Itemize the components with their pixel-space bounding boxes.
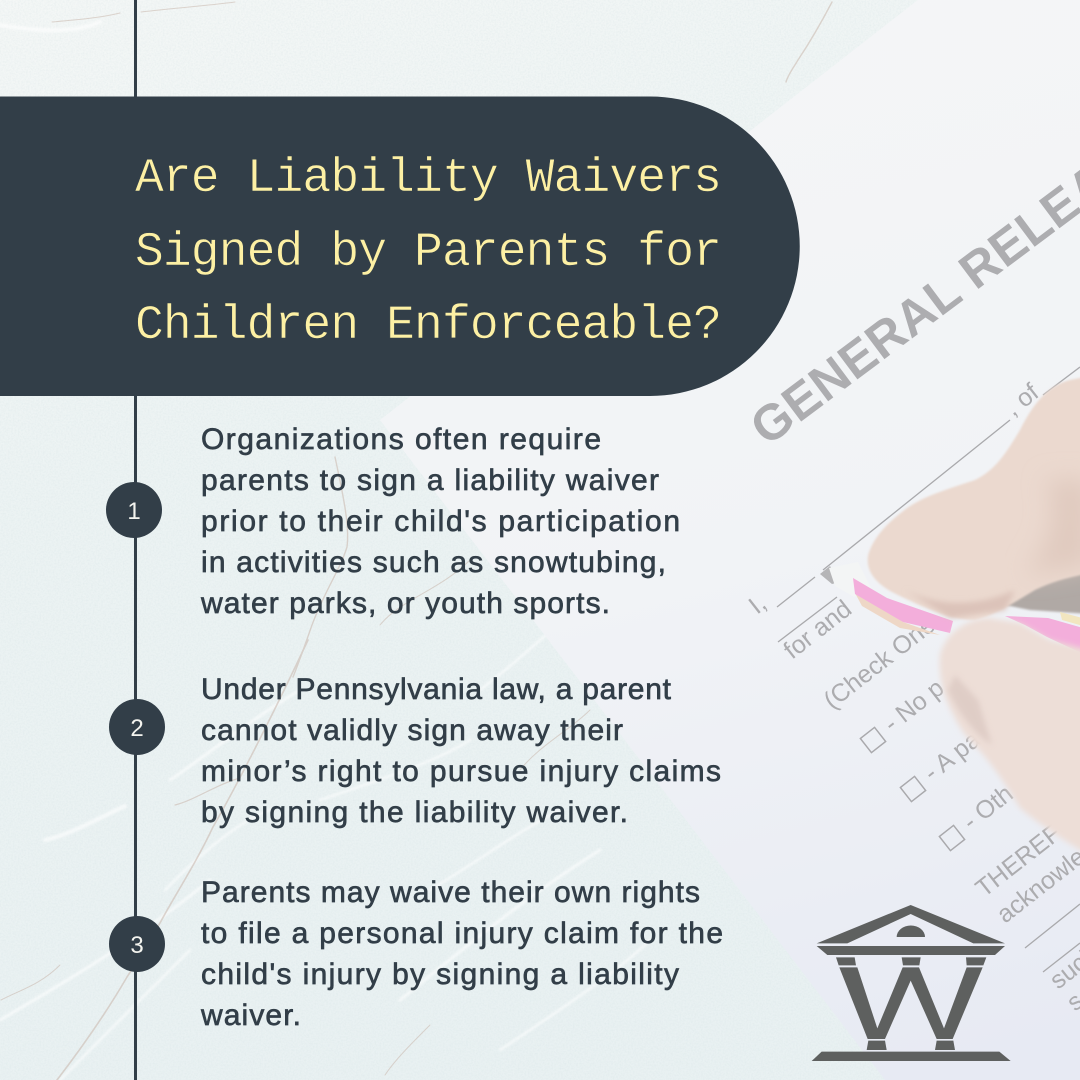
form rule lines [777,367,1080,972]
step 1 [106,423,680,620]
form checkboxes [860,727,965,851]
step 3 text: waiver. [200,999,301,1032]
step 1 text: prior to their child's participation [201,505,680,538]
number badge 2 [109,699,165,755]
timeline vertical line [134,0,137,1080]
step 3 text: Parents may waive their own rights [201,876,700,909]
number badge 3: 3 [130,932,144,959]
title banner [0,96,800,396]
step 1 text [200,423,680,620]
title text [135,152,721,353]
step 1 text: in activities such as snowtubing, [201,546,666,579]
photo: paper sheet [380,0,1080,1080]
step 1 text: Organizations often require [201,423,601,456]
form text lines: - A pay [918,717,996,787]
form text lines: I, [743,589,772,620]
step 3 text [200,876,723,1032]
form text lines [743,378,1080,1017]
photo: form printed on the paper [740,112,1080,1017]
number badge 1: 1 [127,498,141,525]
step 1 text: parents to sign a liability waiver [201,464,659,497]
step 2 [109,673,721,829]
pencil gap shadow [1005,570,1080,614]
step 1 text: water parks, or youth sports. [200,587,610,620]
pencil pink body [853,578,953,633]
step 2 text [201,673,721,829]
step 2 text: minor’s right to pursue injury claims [201,755,721,788]
step 2 text: by signing the liability waiver. [201,796,628,829]
upper finger [868,375,1080,620]
pencil tip [820,566,840,584]
title text: Signed by Parents for [135,226,721,280]
step 3 [109,876,723,1032]
number badge 1 [106,482,162,538]
lower finger [940,618,1080,858]
step 2 text: Under Pennsylvania law, a parent [201,673,672,706]
form text lines: - No p [878,674,949,738]
icon: law firm logo, temple with W [812,905,1011,1061]
number badge 2: 2 [130,715,144,742]
step 3 text: to file a personal injury claim for the [201,917,723,950]
form text lines: for and [778,595,857,665]
step 2 text: cannot validly sign away their [201,714,623,747]
number badge 3 [109,916,165,972]
form text lines: - Oth [957,779,1018,836]
title text: Children Enforceable? [135,299,721,353]
title text: Are Liability Waivers [135,152,721,206]
pencil peach underside [855,593,940,635]
form text lines: (Check One [818,611,941,715]
form text lines: , of [999,378,1044,422]
photo: hand holding pencil [820,375,1080,858]
step 3 text: child's injury by signing a liability [201,958,679,991]
